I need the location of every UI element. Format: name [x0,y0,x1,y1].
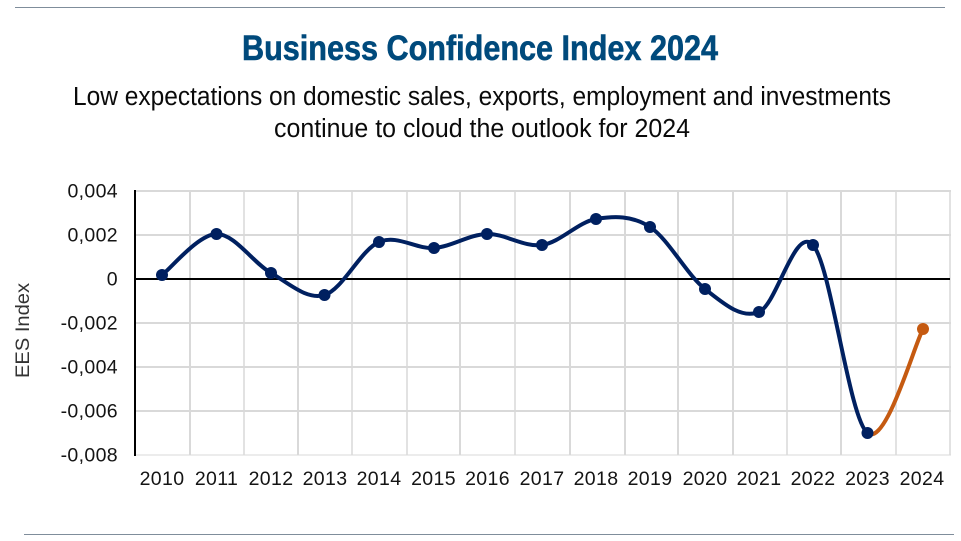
y axis labels: -0,004 [61,357,118,379]
x axis labels [140,468,944,490]
x axis labels: 2023 [845,468,890,490]
x axis labels: 2022 [791,468,835,490]
y axis labels: 0,002 [67,225,118,247]
y axis labels: -0,008 [61,445,118,467]
x axis labels: 2013 [303,468,347,490]
y axis title: EES Index [12,283,34,378]
line: 2010-2023 [162,217,868,433]
x axis labels: 2024 [900,468,944,490]
y axis labels: 0 [107,269,118,291]
y axis labels: -0,006 [61,401,118,423]
subtitle: Low expectations on domestic sales, exports, employment and investments [73,83,891,111]
y axis labels: -0,002 [61,313,118,335]
x axis labels: 2018 [574,468,618,490]
data point markers [156,213,929,439]
x axis labels: 2021 [737,468,781,490]
x axis labels: 2015 [411,468,456,490]
x axis labels: 2014 [357,468,401,490]
line chart: EES index 2010-2024 [12,181,951,490]
line: 2023-2024 forecast [868,329,923,434]
title: Business Confidence Index 2024 [242,29,718,68]
x axis labels: 2011 [195,468,238,490]
y axis labels: 0,004 [67,181,118,203]
x axis labels: 2017 [520,468,564,490]
subtitle [73,83,891,143]
x axis labels: 2020 [683,468,727,490]
x axis labels: 2019 [628,468,672,490]
x axis labels: 2016 [465,468,510,490]
x axis labels: 2012 [249,468,293,490]
subtitle: continue to cloud the outlook for 2024 [274,115,690,143]
y axis labels [61,181,118,467]
x axis labels: 2010 [140,468,184,490]
axes [135,190,950,456]
